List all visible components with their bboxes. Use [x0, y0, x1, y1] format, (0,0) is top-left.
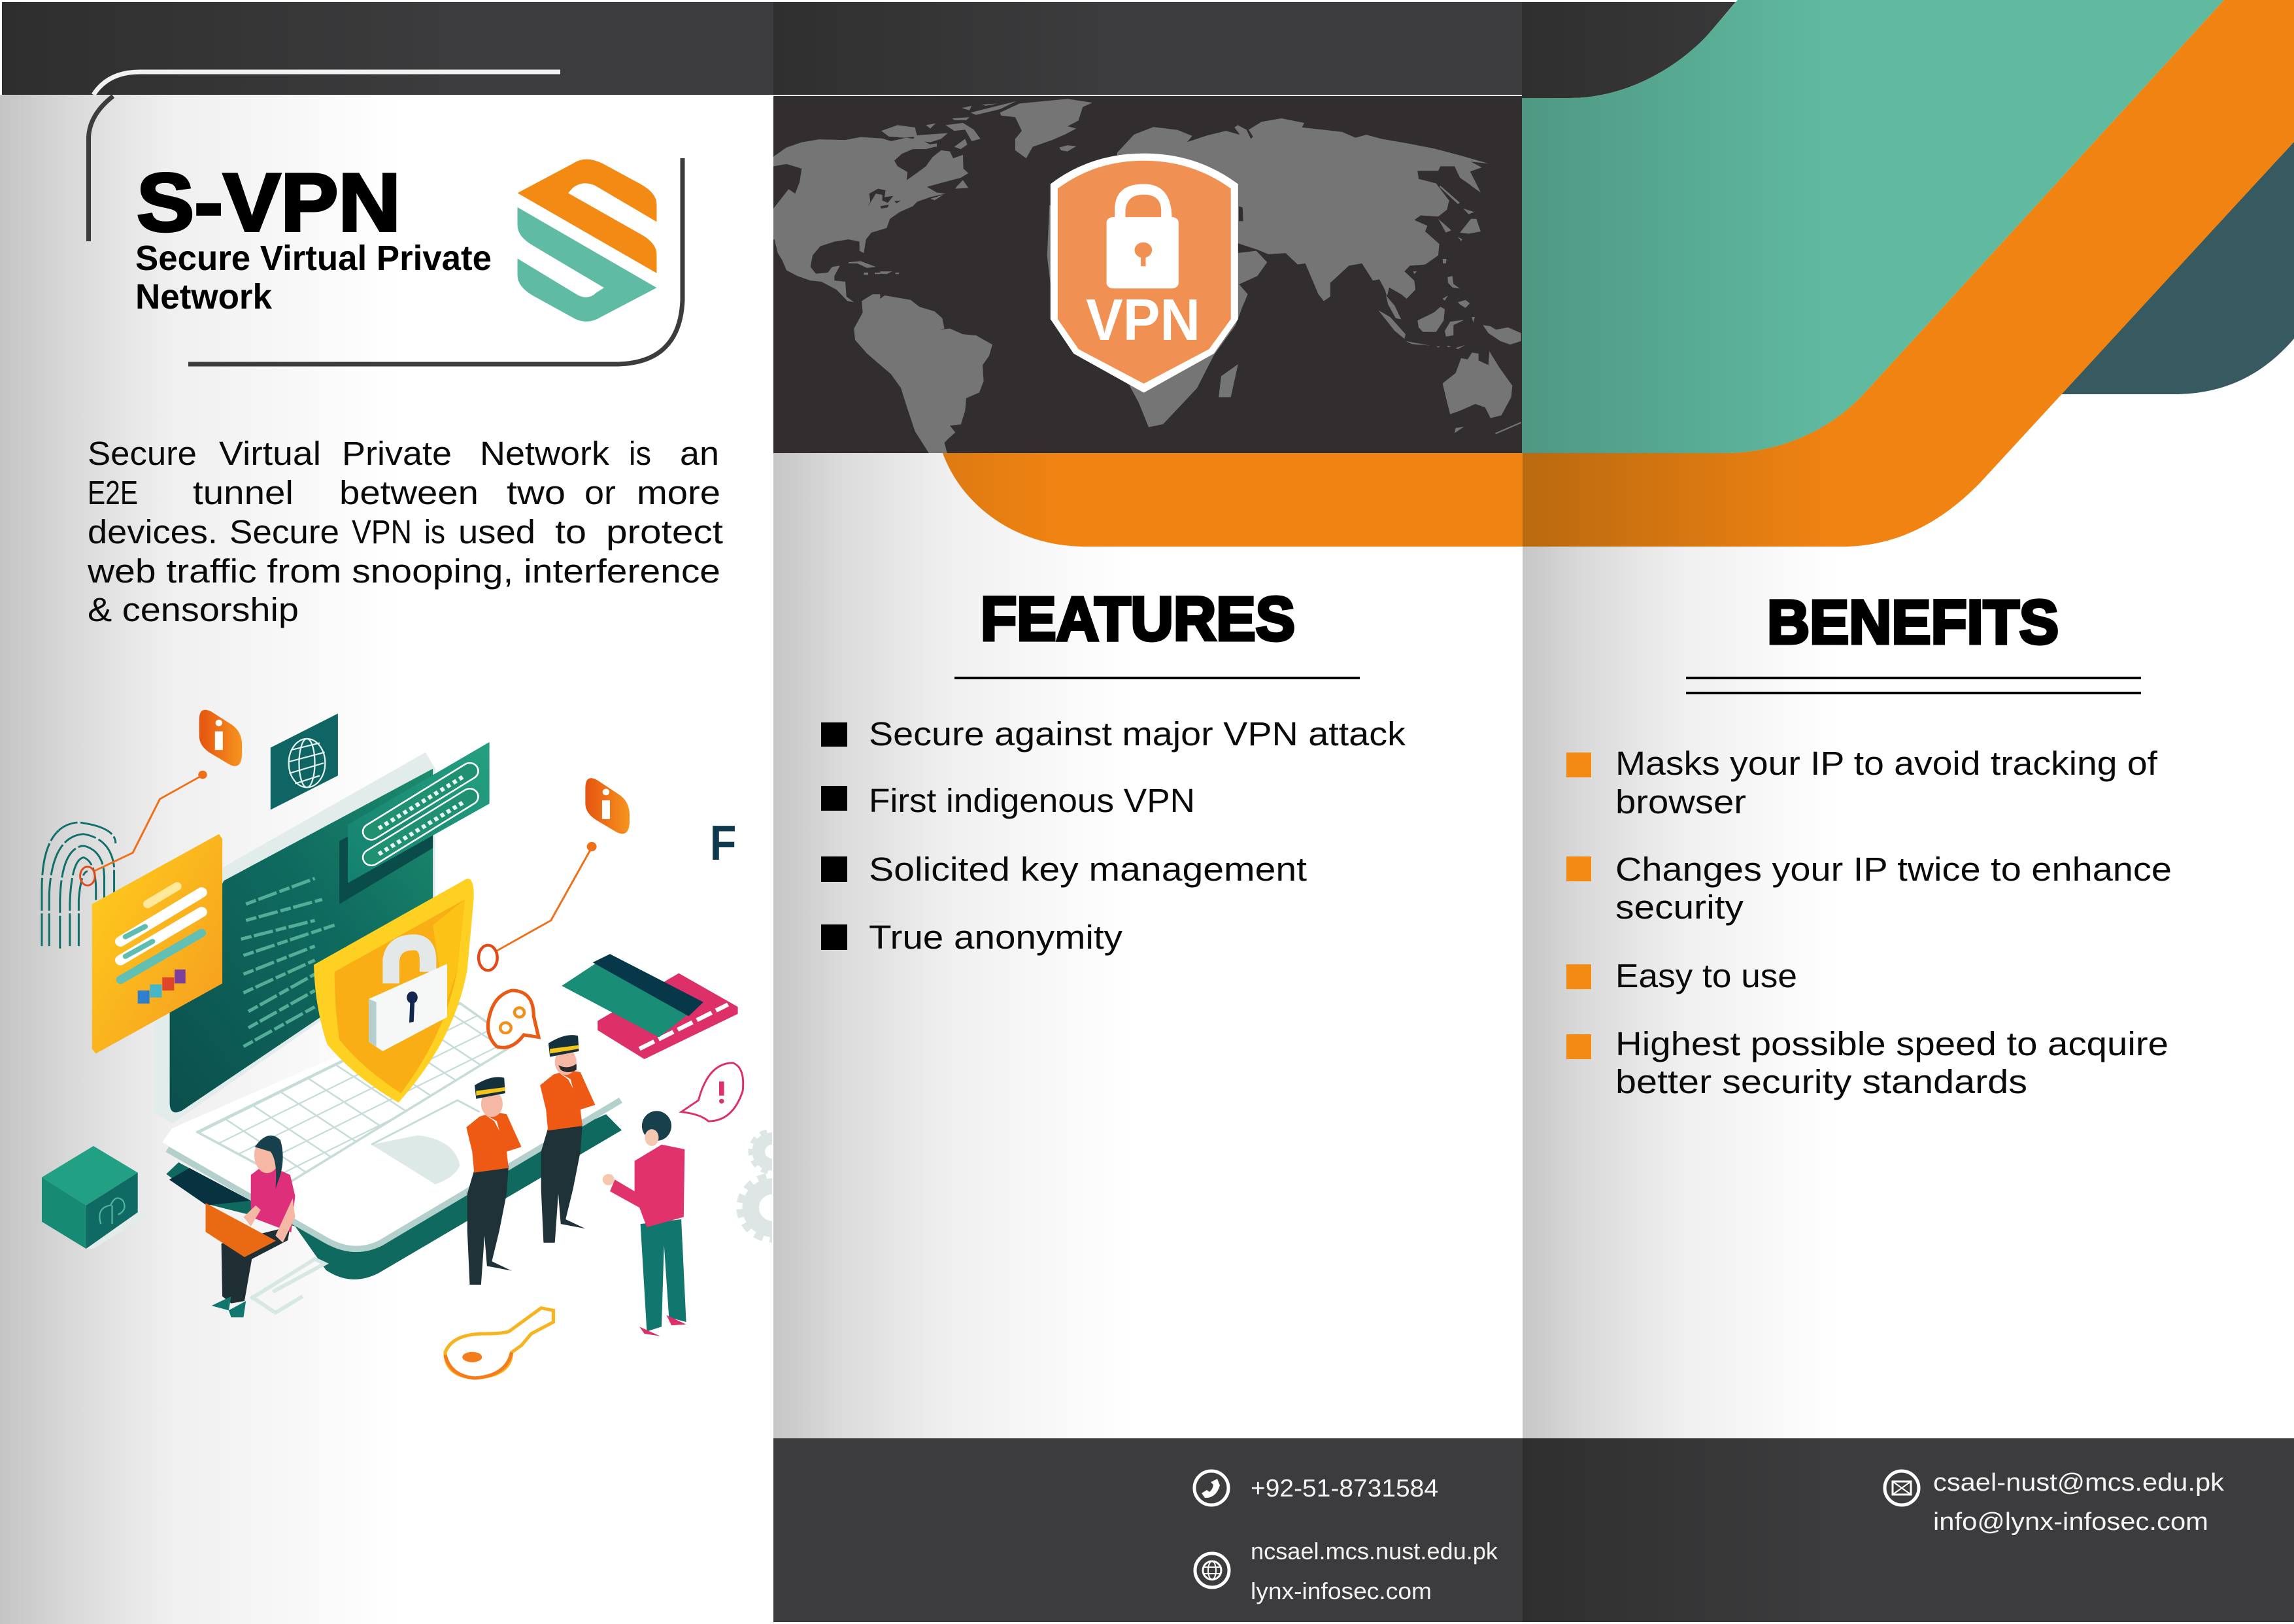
person: officer back	[540, 1035, 595, 1243]
chat bubble: alert	[681, 1063, 743, 1121]
icon: info badge left	[199, 710, 242, 766]
logo frame	[89, 72, 683, 364]
icon: phone	[1194, 1471, 1228, 1505]
contact: email	[1885, 1469, 2225, 1536]
icon: padlock	[369, 942, 447, 1051]
benefit 2: Changes your IP twice to enhance	[1615, 851, 2172, 888]
contact: email: info@lynx-infosec.com	[1933, 1508, 2208, 1536]
swoosh: orange	[943, 0, 2294, 547]
intro paragraph: VPN	[352, 513, 412, 550]
bullet 2: First indigenous VPN	[869, 782, 1195, 819]
intro paragraph: more	[637, 474, 720, 511]
intro paragraph: protect	[606, 513, 723, 550]
list: features	[821, 715, 1406, 956]
subtitle: Network	[135, 277, 273, 316]
intro paragraph: Private	[342, 435, 452, 472]
login panel	[92, 834, 222, 1053]
panel: right fold shading	[1523, 547, 2294, 1440]
intro paragraph: Network	[480, 435, 610, 472]
fingerprint	[42, 822, 116, 949]
password card	[348, 742, 490, 883]
contact: phone: +92-51-8731584	[1251, 1475, 1438, 1502]
world map: africa and europe	[1047, 205, 1248, 427]
world map: americas	[773, 99, 1092, 455]
vpn shield badge	[1051, 154, 1238, 393]
letter fragment: F	[710, 816, 736, 871]
intro paragraph: two	[507, 474, 565, 511]
intro paragraph: is	[629, 435, 651, 472]
benefit 2: security	[1615, 888, 1744, 926]
icon: gears	[736, 1130, 772, 1243]
world map: asia and oceania	[1117, 118, 1521, 434]
intro paragraph: E2E	[88, 474, 138, 511]
person: woman with laptop	[206, 1136, 325, 1317]
contact: phone	[1194, 1471, 1438, 1505]
intro paragraph: between	[339, 474, 479, 511]
intro paragraph: Secure	[88, 435, 197, 472]
title: S-VPN: S-VPN	[137, 156, 401, 248]
intro paragraph: Virtual	[219, 435, 321, 472]
benefit 4	[1566, 1025, 2168, 1100]
heading: benefits: BENEFITS	[1767, 588, 2059, 657]
icon: cube	[42, 1146, 146, 1249]
contact: web: ncsael.mcs.nust.edu.pk	[1251, 1538, 1498, 1565]
benefit 4: Highest possible speed to acquire	[1615, 1025, 2168, 1062]
credit cards	[562, 954, 738, 1059]
contact: web	[1195, 1538, 1498, 1604]
benefit 1	[1566, 745, 2158, 820]
intro paragraph: tunnel	[193, 474, 294, 511]
intro paragraph: used	[458, 513, 535, 550]
intro paragraph: an	[680, 435, 719, 472]
icon: padlock	[1107, 184, 1179, 288]
intro paragraph: is	[424, 513, 445, 550]
benefit 3: Easy to use	[1615, 957, 1797, 994]
illustration: cyber security scene	[42, 710, 807, 1378]
benefit 1: browser	[1615, 783, 1746, 820]
benefit 1: Masks your IP to avoid tracking of	[1615, 745, 2158, 782]
person: man with phone	[603, 1111, 686, 1336]
icon: info badge right	[585, 778, 630, 834]
header bar: middle	[773, 2, 1523, 95]
list: benefits	[1566, 745, 2172, 1100]
swoosh: orange fold shading	[1523, 391, 1982, 547]
icon: key	[445, 1308, 553, 1378]
benefit 4: better security standards	[1615, 1063, 2027, 1100]
divider: benefits	[1686, 677, 2141, 694]
header bar: right swoosh	[1522, 2, 1736, 98]
bullet 3: Solicited key management	[869, 851, 1307, 888]
footer bar: right	[1523, 1438, 2294, 1622]
intro paragraph: Secure	[229, 513, 339, 550]
benefit 2	[1566, 851, 2172, 926]
footer bar: middle	[773, 1438, 1523, 1622]
subtitle	[135, 239, 492, 316]
globe card	[271, 713, 338, 810]
intro paragraph: devices.	[88, 513, 218, 550]
icon: envelope	[1885, 1471, 1919, 1505]
intro paragraph	[87, 435, 723, 628]
person: officer front	[466, 1077, 522, 1285]
contact: web: lynx-infosec.com	[1251, 1578, 1432, 1604]
chat bubble: chain	[488, 990, 539, 1047]
intro paragraph: & censorship	[88, 591, 299, 628]
bullet 1: Secure against major VPN attack	[869, 715, 1406, 753]
connector lines	[80, 771, 596, 970]
contact: email: csael-nust@mcs.edu.pk	[1933, 1469, 2225, 1497]
laptop	[154, 753, 622, 1279]
shield label: VPN	[1086, 288, 1200, 353]
heading: features: FEATURES	[981, 584, 1295, 654]
intro paragraph: web traffic from snooping, interference	[87, 552, 720, 590]
swoosh: teal	[1522, 0, 2224, 453]
security shield	[314, 879, 474, 1102]
header bar: left	[2, 2, 773, 95]
icon: globe	[1195, 1553, 1229, 1587]
panel: left fold shading	[0, 95, 773, 1624]
panel: world map banner	[773, 95, 1523, 455]
bullet 4: True anonymity	[869, 919, 1123, 956]
intro paragraph: or	[584, 474, 616, 511]
subtitle: Secure Virtual Private	[135, 239, 492, 278]
panel: middle fold shading	[773, 453, 1523, 1440]
icon: S logo	[518, 160, 656, 322]
intro paragraph: to	[555, 513, 586, 550]
swoosh: dark teal	[2061, 142, 2294, 394]
divider: features	[954, 677, 1360, 679]
